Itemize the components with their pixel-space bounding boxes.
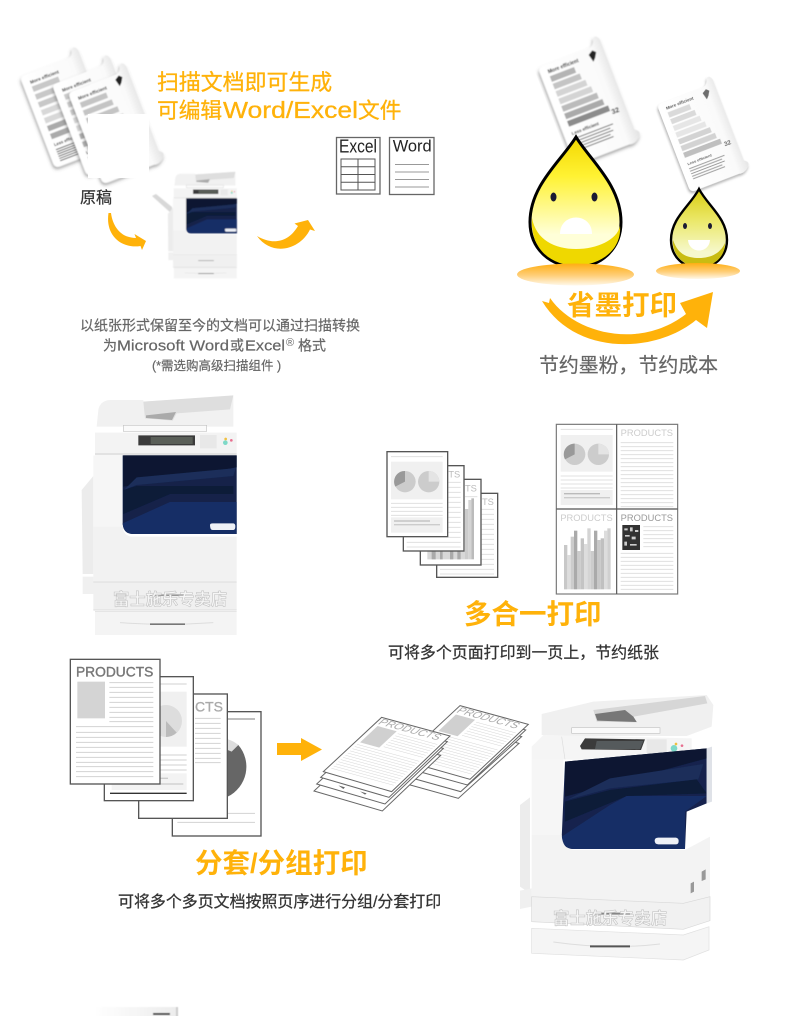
illustration: four-up sheet: PRODUCTS [621, 428, 673, 438]
illustration: collated stacks: PRODUCTS [375, 717, 444, 742]
title: scan headline: 文件 [358, 98, 401, 123]
illustration: collated stacks [314, 706, 528, 811]
illustration: paper, small drop: 32 [723, 139, 733, 148]
text: scan description: 或 [230, 338, 244, 354]
text: scan description: 以纸张形式保留至今的文档可以通过扫描转换 [80, 318, 360, 334]
watermark: 富士施乐专卖店 [113, 590, 227, 609]
stack behind [390, 706, 528, 798]
text: scan description: Excel [245, 338, 285, 354]
heading: 分套/分组打印: 分套/分组打印 [195, 848, 368, 878]
arrow: swoosh [542, 292, 713, 344]
illustration: paper, small drop: More efficient [665, 96, 695, 111]
illustration: four source pages: TS [448, 470, 460, 480]
illustration: paper, large drop: 32 [611, 107, 621, 116]
arrow: to collated sets [277, 738, 322, 761]
shadow: small drop [656, 263, 740, 279]
illustration: paper, large drop [535, 34, 642, 166]
title: scan headline [157, 70, 401, 123]
arrow: into copier [108, 213, 146, 250]
illustration: original paper sheets: More efficient [77, 85, 108, 101]
title: scan headline: Word/Excel [223, 97, 358, 123]
icon: small ink drop [671, 189, 727, 268]
white mask over original [88, 114, 149, 178]
illustration: source documents: PRODUCTS [76, 664, 153, 680]
text: toner saving note: 节约墨粉，节约成本 [539, 354, 718, 377]
illustration: four-up sheet: PRODUCTS [560, 513, 613, 523]
text: N-up note: 可将多个页面打印到一页上，节约纸张 [388, 644, 659, 662]
illustration: source documents: CTS [195, 699, 223, 715]
shadow: large drop [517, 264, 634, 286]
illustration: original paper sheets: Less efficient [53, 133, 81, 147]
illustration: source documents [70, 659, 261, 836]
panel: N-up printing [387, 424, 678, 662]
illustration: original paper sheets: More efficient [61, 77, 92, 93]
illustration: collated stacks: PRODUCTS [453, 706, 523, 731]
copier: small [152, 172, 237, 278]
arrow: out of copier [257, 220, 315, 249]
illustration: four source pages: TS [482, 497, 494, 507]
text: collating note: 可将多个多页文档按照页序进行分组/分套打印 [118, 893, 441, 911]
illustration: original paper sheets: More efficient [29, 69, 60, 85]
heading: 多合一打印: 多合一打印 [464, 598, 602, 630]
text: scan description: 格式 [298, 338, 326, 354]
text: scan description: ® [286, 337, 294, 349]
watermark: 富士施乐专卖店 [553, 909, 667, 928]
icon: Word document [390, 137, 434, 194]
illustration: four source pages [387, 452, 498, 577]
illustration: paper, large drop: More efficient [547, 58, 580, 75]
panel: scan to Word/Excel [17, 45, 434, 373]
title: scan headline: 扫描文档即可生成 [157, 70, 332, 95]
stack front [314, 717, 450, 811]
illustration: four-up sheet [556, 424, 678, 594]
label: 原稿: 原稿 [80, 189, 112, 207]
illustration: paper, small drop [654, 74, 751, 193]
copier: large perspective with watermark [520, 695, 713, 960]
title: scan headline: 可编辑 [157, 98, 222, 123]
illustration: paper, large drop: Less efficient [571, 121, 600, 136]
illustration: original paper sheets: Less efficient [85, 141, 113, 155]
illustration: clipped sheet at bottom edge [93, 1007, 178, 1016]
copier: medium with watermark [82, 395, 237, 635]
text: scan description: (*需选购高级扫描组件 ) [152, 358, 281, 373]
text: scan description [80, 318, 360, 373]
illustration: original paper sheets [17, 45, 166, 185]
icon: Excel document: Excel [339, 137, 377, 157]
panel: toner saving [517, 34, 751, 377]
illustration: paper, small drop: Less efficient [686, 152, 713, 166]
icon: Word document: Word [393, 137, 432, 156]
illustration: four source pages: TS [465, 483, 477, 493]
illustration: four-up sheet: PRODUCTS [621, 513, 673, 523]
text: scan description: Microsoft Word [117, 338, 229, 354]
icon: Excel document [336, 137, 380, 194]
heading: 省墨打印: 省墨打印 [567, 290, 677, 320]
text: scan description: 为 [103, 338, 117, 354]
icon: large ink drop [530, 137, 621, 267]
panel: collated printing [70, 659, 528, 911]
